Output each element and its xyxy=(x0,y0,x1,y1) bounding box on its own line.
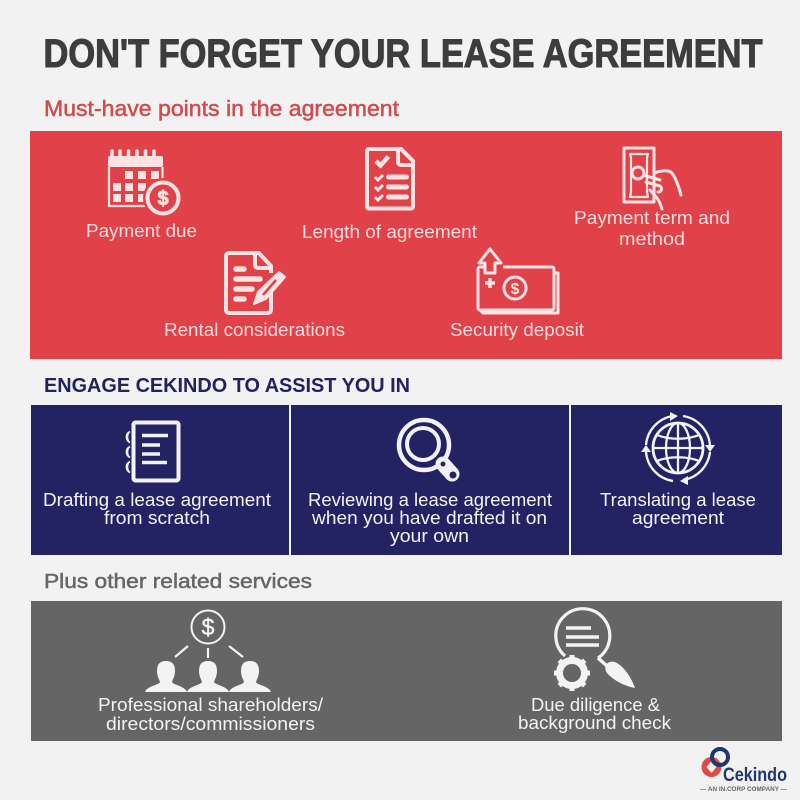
icon: hand holding banknote xyxy=(624,148,681,209)
icon: coin above three people xyxy=(145,610,271,692)
panel: reviewing xyxy=(291,405,569,555)
label: due diligence: background check xyxy=(518,712,672,733)
icon: banknotes with up arrow: $ xyxy=(511,281,520,298)
logo tagline: — AN IN.CORP COMPANY — xyxy=(700,787,787,793)
panel: must-have points xyxy=(30,131,782,359)
label: translating: agreement xyxy=(632,507,724,528)
item: security deposit xyxy=(450,249,584,340)
heading: must-have points: Must-have points in the agreement xyxy=(44,96,399,121)
label: reviewing: your own xyxy=(390,525,469,546)
icon: calendar with dollar coin: $ xyxy=(157,188,169,210)
label: security deposit: Security deposit xyxy=(450,319,584,340)
label: due diligence: Due diligence & xyxy=(531,694,661,715)
label: payment term and method: method xyxy=(619,228,685,249)
label: translating: Translating a lease xyxy=(600,489,756,510)
heading: engage cekindo: ENGAGE CEKINDO TO ASSIST YOU IN xyxy=(44,374,410,397)
label: professional shareholders: Professional shareholders/ xyxy=(98,694,324,715)
panel: drafting xyxy=(31,405,289,555)
heading: other services: Plus other related services xyxy=(44,570,312,593)
item: professional shareholders xyxy=(98,610,324,734)
panel: translating xyxy=(571,405,782,555)
label: reviewing: Reviewing a lease agreement xyxy=(308,489,552,510)
icon: notebook xyxy=(126,422,178,480)
label: payment due: Payment due xyxy=(86,220,197,241)
label: reviewing: when you have drafted it on xyxy=(311,507,547,528)
logo wordmark: Cekindo xyxy=(723,765,787,786)
item: due diligence xyxy=(518,609,672,733)
icon: document with pencil xyxy=(226,253,285,313)
item: payment due xyxy=(86,151,197,241)
item: payment term and method xyxy=(574,148,730,249)
item: rental considerations xyxy=(164,253,345,340)
label: drafting: from scratch xyxy=(104,507,210,528)
label: rental considerations: Rental considerations xyxy=(164,319,345,340)
icon: checklist document xyxy=(367,149,413,208)
label: payment term and method: Payment term and xyxy=(574,207,730,228)
label: drafting: Drafting a lease agreement xyxy=(43,489,271,510)
logo mark xyxy=(702,749,728,777)
logo: Cekindo xyxy=(700,749,787,793)
panel: other services xyxy=(31,601,782,741)
icon: globe with rotating arrows xyxy=(641,412,715,485)
item: length of agreement xyxy=(302,149,477,242)
icon: magnifier with gear xyxy=(554,609,635,691)
label: professional shareholders: directors/commissioners xyxy=(106,713,315,734)
icon: magnifying glass xyxy=(399,420,456,478)
label: length of agreement: Length of agreement xyxy=(302,221,477,242)
icon: coin above three people: $ xyxy=(202,614,215,640)
